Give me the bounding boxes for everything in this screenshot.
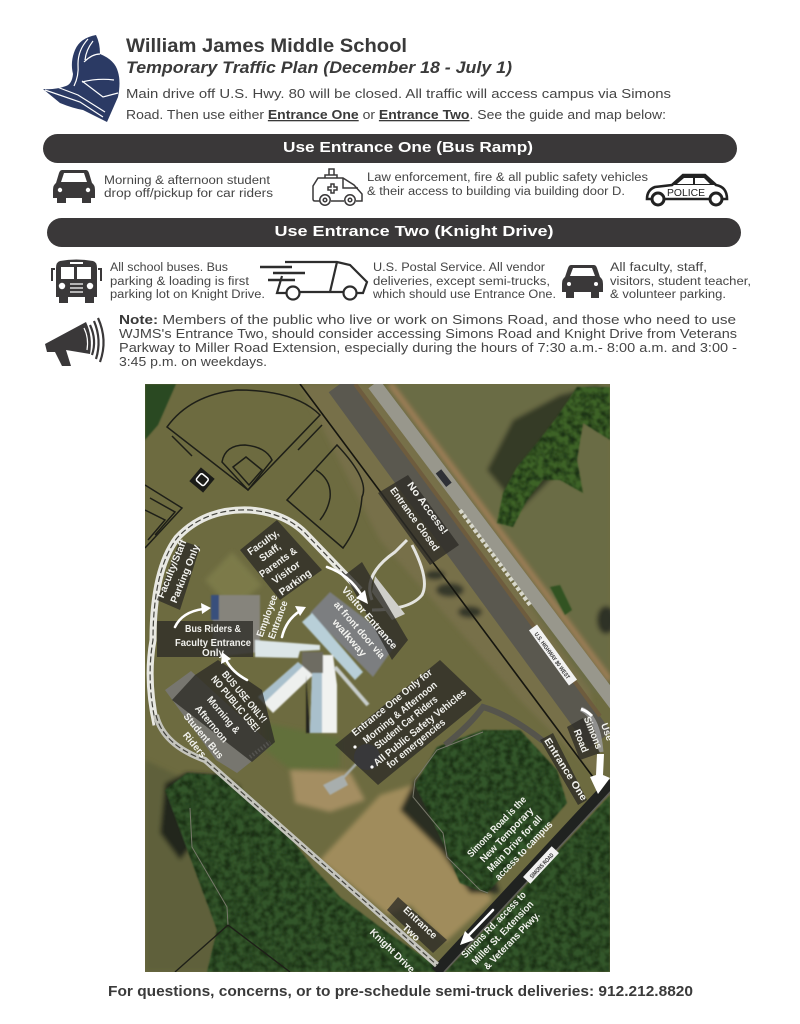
text: postal and vendors: which should use Entrance One.	[372, 289, 556, 301]
label: Faculty/Staff Parking: Faculty/Staff	[156, 538, 190, 600]
road to Entrance One	[445, 707, 543, 745]
label: Bus Riders and Faculty Entrance: Faculty Entrance	[175, 638, 251, 649]
label: Visitor Entrance: walkway	[329, 617, 368, 660]
sign: U.S. Highway 80 West: U.S. HIGHWAY 80 WEST	[532, 632, 570, 681]
text: car riders: Morning & afternoon student	[104, 175, 271, 187]
text: school buses	[110, 262, 265, 301]
label: Entrance One only	[335, 660, 482, 785]
label: Faculty Staff Parents Visitor Parking: Visitor	[270, 559, 303, 587]
map: aerial campus map	[145, 384, 620, 976]
banner: Use Entrance One: Use Entrance One (Bus Ramp)	[283, 139, 533, 156]
label: Use Simons Road	[567, 716, 610, 760]
label: Faculty Staff Parents Visitor Parking: Faculty,	[246, 528, 281, 558]
intro text: Main drive off U.S. Hwy. 80 will be closed. All traffic will access campus via Simons	[126, 86, 672, 101]
arrows: campus entrances	[175, 567, 493, 945]
label: Visitor Entrance: Visitor Entrance	[339, 585, 399, 652]
text: faculty parking	[610, 262, 751, 301]
label: Visitor Entrance	[329, 562, 408, 661]
icon: car front 2	[562, 265, 603, 298]
label: Faculty Staff Parents Visitor Parking: Staff,	[258, 541, 284, 564]
label: Bus use only	[172, 660, 275, 762]
title: William James Middle School	[126, 36, 407, 57]
label: Use Simons Road: Simons	[581, 715, 604, 751]
banner: Use Entrance One	[43, 134, 737, 163]
label: Entrance Two: Two	[400, 922, 422, 944]
label: Entrance One only: for emergencies	[385, 717, 448, 771]
label: Use Simons Road: Use	[598, 722, 615, 743]
label: Simons Rd access: & Veterans Pkwy.	[482, 910, 543, 972]
note text: Note: Members of the public who live or work on Simons Road, and those who need to use	[119, 313, 736, 327]
label: Bus use only: NO PUBLIC USE!	[208, 674, 262, 735]
text: faculty parking: All faculty, staff,	[610, 262, 707, 274]
label: Bus use only: Afternoon	[192, 704, 230, 745]
banner: Use Entrance Two: Use Entrance Two (Knight Drive)	[274, 223, 554, 240]
text: faculty parking: & volunteer parking.	[610, 289, 726, 301]
sign: Simons Road: SIMONS ROAD	[529, 852, 556, 880]
icon: ambulance	[313, 169, 362, 205]
label: Bus use only: Morning &	[204, 695, 242, 736]
forest fences	[175, 732, 488, 972]
icon: megaphone	[45, 318, 104, 366]
label: Entrance Two: Entrance	[401, 905, 439, 942]
label: Faculty/Staff Parking	[156, 538, 203, 610]
intro text: Road. Then use either Entrance One or Entrance Two . See the guide and map below:	[126, 107, 666, 122]
school buildings	[211, 592, 397, 795]
footer contact line: For questions, concerns, or to pre-schedule semi-truck deliveries: 912.212.8820	[108, 984, 693, 1000]
icon: car front	[53, 170, 95, 203]
text: school buses: parking lot on Knight Drive.	[110, 289, 265, 301]
text: school buses: parking & loading is first	[110, 276, 250, 288]
label: Simons Rd access: Miller St. Extension	[470, 899, 536, 967]
label: Employee Entrance: Entrance	[267, 599, 291, 641]
label: Entrance One: Entrance One	[541, 736, 589, 804]
parking lot and drives	[165, 671, 272, 773]
text: postal and vendors: U.S. Postal Service. All vendor	[373, 262, 545, 274]
label: No Access: No Access!	[404, 480, 450, 537]
text: school buses: All school buses. Bus	[110, 262, 228, 274]
note text: WJMS's Entrance Two, should consider accessing Simons Road and Knight Drive from Veterans	[119, 327, 737, 341]
intro text	[126, 86, 672, 122]
label: Faculty/Staff Parking: Parking Only	[169, 543, 203, 605]
label: Bus use only: BUS USE ONLY!	[219, 669, 269, 725]
text: car riders	[104, 175, 273, 200]
label: Bus Riders and Faculty Entrance: Only	[202, 648, 224, 659]
marker D	[189, 467, 215, 493]
icon: police car: POLICE	[667, 188, 705, 199]
icon: delivery truck	[260, 262, 367, 300]
subtitle: Temporary Traffic Plan (December 18 - July 1)	[126, 58, 512, 77]
label: Entrance One only: Entrance One Only for	[350, 667, 435, 739]
label: Bus Riders and Faculty Entrance: Bus Riders &	[185, 624, 241, 635]
label: Visitor Entrance: at front door via	[331, 600, 387, 661]
label: Employee Entrance: Employee	[255, 593, 280, 639]
icon: police car	[647, 175, 727, 205]
text: public safety: Law enforcement, fire & all public safety vehicles	[367, 172, 648, 184]
label: Simons Road is the new main drive	[467, 798, 552, 880]
label: No Access: Entrance Closed	[387, 486, 441, 554]
label: Entrance Two	[387, 897, 447, 953]
text: postal and vendors	[372, 262, 556, 301]
label: Entrance One only: Student Car Riders	[373, 694, 440, 752]
note text: 3:45 p.m. on weekdays.	[119, 355, 267, 369]
label: Bus Riders and Faculty Entrance	[157, 621, 253, 659]
label: Faculty Staff Parents Visitor Parking	[240, 520, 322, 600]
text: car riders: drop off/pickup for car riders	[104, 188, 273, 200]
note text	[119, 313, 737, 369]
sign: Simons Road	[523, 846, 559, 884]
label: Entrance One only: Morning & Afternoon	[361, 680, 440, 746]
label: Bus use only: Student Bus	[181, 711, 225, 762]
label: Simons Road is the new main drive: New Temporary	[478, 805, 536, 865]
label: Entrance One only: All Public Safety Vehicles	[372, 687, 469, 769]
arrow: Simons Road entry	[581, 709, 610, 794]
label: Simons Rd access: Simons Rd. access to	[460, 890, 529, 961]
label: Bus use only: Riders	[180, 730, 208, 761]
baseball fields	[145, 390, 364, 548]
logo: knight helmet	[43, 35, 120, 122]
note text: Parkway to Miller Road Extension, especially during the hours of 7:30 a.m.- 8:00 a.m. and 3:00 -	[119, 341, 737, 355]
icon: school bus	[52, 260, 101, 303]
label: Faculty Staff Parents Visitor Parking: Parents &	[257, 546, 300, 580]
label: Simons Road is the new main drive: Main Drive for all	[486, 814, 545, 875]
label: Simons Road is the new main drive: Simons Road is the	[465, 794, 529, 860]
text: postal and vendors: deliveries, except semi-trucks,	[373, 276, 550, 288]
label: Simons Road is the new main drive: access to campus	[493, 819, 556, 883]
highway and rail corridor	[300, 384, 620, 777]
Simons Road	[436, 782, 612, 972]
text: public safety	[367, 172, 648, 198]
text: public safety: & their access to building via building door D.	[367, 186, 625, 198]
banner: Use Entrance Two	[47, 218, 741, 247]
label: No Access	[378, 475, 459, 565]
label: Faculty Staff Parents Visitor Parking: Parking	[277, 568, 314, 598]
label: Use Simons Road: Road	[571, 728, 590, 754]
label: Knight Drive: Knight Drive	[367, 927, 417, 976]
text: faculty parking: visitors, student teacher,	[610, 276, 751, 288]
